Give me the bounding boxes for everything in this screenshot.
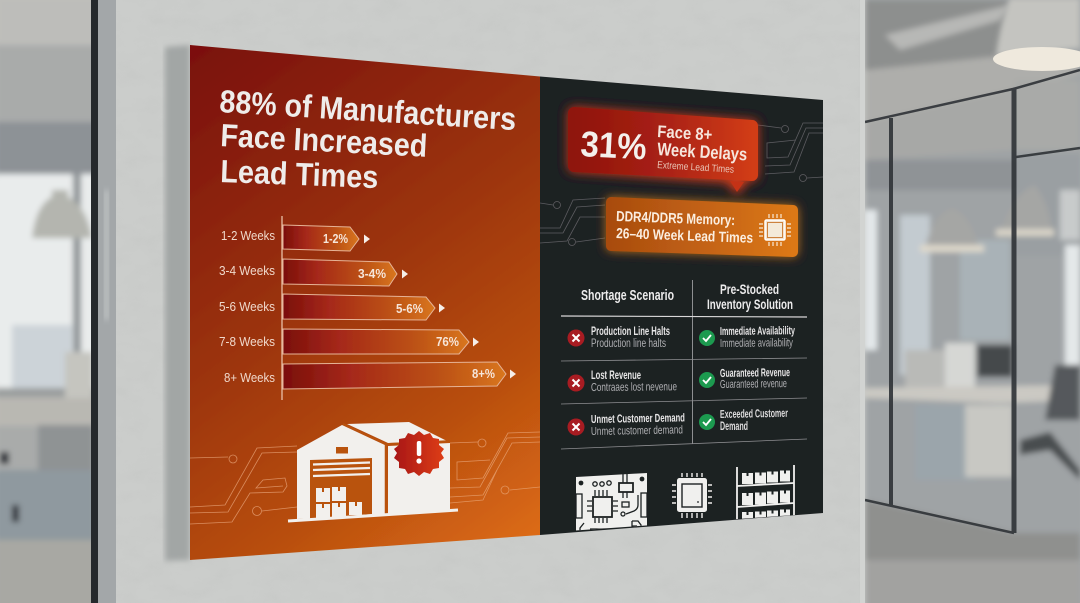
callout: 31% face 8+ week delays: Week Delays: [657, 139, 748, 164]
icon: processor chip: [672, 473, 712, 518]
bar: 5-6 weeks: [219, 294, 445, 320]
row: production line halts: Immediate availability: [720, 337, 793, 350]
bar: 5-6 weeks: 5-6 Weeks: [219, 299, 275, 314]
title: Lead Times: [220, 153, 379, 195]
loading door: [310, 458, 372, 519]
background: left office: [0, 0, 100, 603]
table headers: Pre-Stocked: [720, 281, 779, 297]
background: window frame column: [91, 0, 116, 603]
bar: 1-2 weeks: 1-2 Weeks: [221, 228, 275, 243]
panel: dark right: [540, 76, 823, 540]
icon: circuit board: [576, 473, 647, 530]
comparison table: [561, 280, 807, 449]
bar: 7-8 weeks: 7-8 Weeks: [219, 334, 275, 349]
title: [219, 83, 517, 195]
row: lost revenue: Guaranteed Revenue: [720, 367, 790, 380]
title: Face Increased: [220, 117, 428, 164]
table headers: Inventory Solution: [707, 296, 793, 312]
callout: 31% face 8+ week delays: Extreme Lead Times: [657, 160, 734, 176]
bar: 5-6 weeks: 5-6%: [396, 302, 423, 316]
row: unmet customer demand: Unmet Customer Demand: [591, 412, 685, 426]
row: unmet customer demand: [568, 408, 788, 438]
table headers: Shortage Scenario: [581, 287, 674, 304]
bar: 1-2 weeks: [221, 225, 370, 251]
bar: 8+ weeks: [224, 362, 516, 389]
bar: 1-2 weeks: 1-2%: [323, 232, 348, 246]
warehouse body: [297, 422, 450, 519]
row: production line halts: Production Line Halts: [591, 326, 670, 338]
row: unmet customer demand: Exceeded Customer: [720, 408, 788, 421]
callout: DDR4/DDR5 memory lead times: [611, 202, 793, 252]
bottom icons: [576, 465, 795, 530]
bar: 3-4 weeks: 3-4%: [358, 267, 386, 281]
callout: 31% face 8+ week delays: Face 8+: [657, 122, 713, 144]
stacked boxes: [316, 487, 362, 518]
icon: inventory shelving: [736, 465, 795, 520]
row: lost revenue: [568, 367, 790, 394]
row: production line halts: [568, 325, 795, 350]
callout: 31% face 8+ week delays: 31%: [580, 123, 648, 167]
warehouse vent: [336, 447, 348, 454]
row: production line halts: Immediate Availability: [720, 325, 795, 338]
callout: DDR4/DDR5 memory lead times: 26–40 Week Lead Times: [616, 226, 753, 247]
bar: 3-4 weeks: [219, 259, 408, 286]
icon: warehouse with alert: [288, 422, 458, 521]
callout: DDR4/DDR5 memory lead times: DDR4/DDR5 Memory:: [616, 209, 735, 229]
bar: 8+ weeks: 8+ Weeks: [224, 370, 275, 385]
bar: 7-8 weeks: [219, 329, 479, 354]
icon: memory chip: [759, 214, 791, 246]
panel drop shadow: [165, 45, 190, 561]
panel: lead times (left): [190, 45, 540, 560]
table headers: [581, 281, 793, 312]
background: concrete wall: [116, 0, 865, 603]
wall edge strip: [860, 0, 865, 603]
background: ceiling lamp: [993, 0, 1080, 71]
title: 88% of Manufacturers: [219, 83, 517, 137]
alert badge: [394, 431, 444, 476]
circuit traces: left panel: [190, 432, 540, 524]
row: lost revenue: Guaranteed revenue: [720, 378, 787, 391]
bar: 3-4 weeks: 3-4 Weeks: [219, 263, 275, 278]
row: lost revenue: Lost Revenue: [591, 370, 641, 382]
circuit traces: right panel: [540, 123, 823, 246]
row: unmet customer demand: Demand: [720, 421, 748, 433]
bar: 8+ weeks: 8+%: [472, 367, 495, 381]
background: right office: [865, 0, 1080, 603]
bar chart: lead time distribution: [219, 216, 516, 400]
background: glass partition frame: [865, 70, 1080, 533]
ground line: [288, 510, 458, 521]
row: production line halts: Production line halts: [591, 338, 666, 350]
row: unmet customer demand: Unmet customer demand: [591, 424, 683, 438]
row: lost revenue: Contraaes lost nevenue: [591, 381, 677, 394]
table rules: [561, 280, 807, 449]
callout: 31% face 8+ week delays: [574, 113, 752, 192]
bar: 7-8 weeks: 76%: [436, 335, 459, 349]
